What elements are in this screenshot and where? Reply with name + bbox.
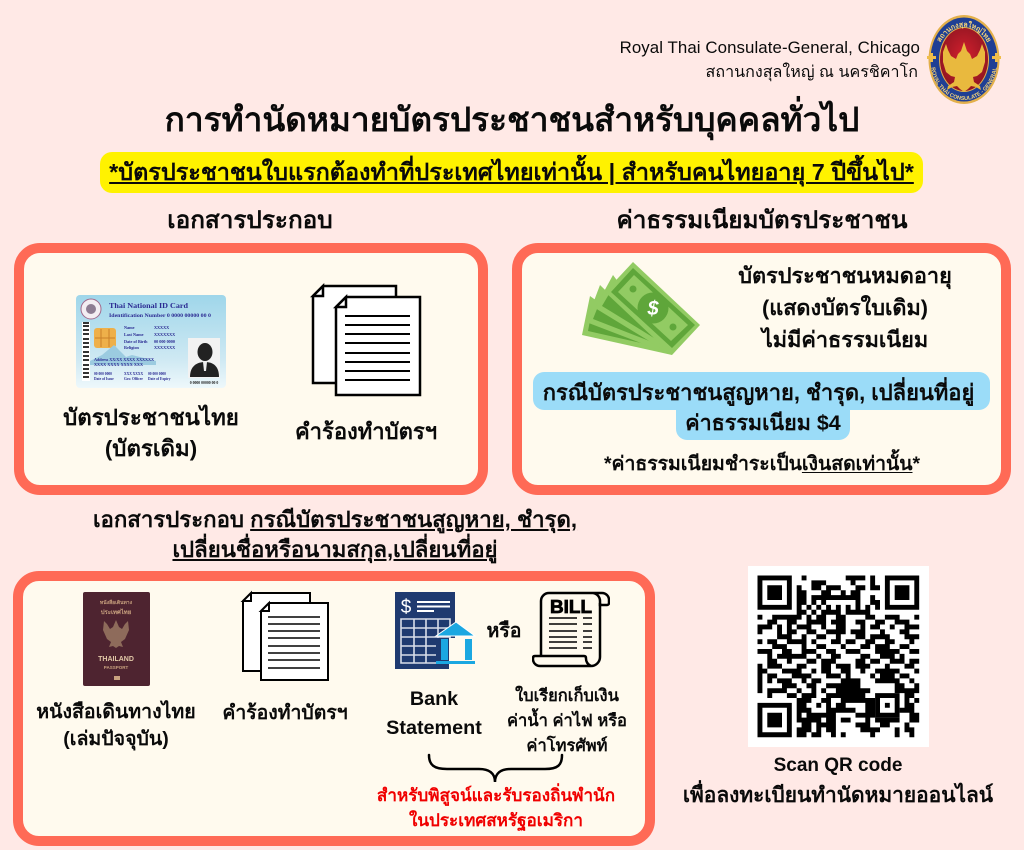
icon: Thai ID card: XXXXXXX xyxy=(154,332,175,337)
icon: application forms xyxy=(310,283,422,396)
icon: Thai ID card: Address XX/XX XXXX XXXXXX xyxy=(94,357,154,362)
note: proof of residence: ในประเทศสหรัฐอเมริกา xyxy=(409,811,583,830)
heading: documents for lost or changed cards: เอกสารประกอบ กรณีบัตรประชาชนสูญหาย, ชำรุด, xyxy=(93,507,577,532)
icon: consulate emblem xyxy=(927,15,1001,104)
text: expired card fee: บัตรประชาชนหมดอายุ xyxy=(738,263,952,288)
label: Thai ID card: (บัตรเดิม) xyxy=(105,436,197,461)
icon: bank statement xyxy=(395,592,476,669)
consulate name: Royal Thai Consulate-General, Chicago xyxy=(620,38,920,57)
callout: lost card fee: กรณีบัตรประชาชนสูญหาย, ชำรุด, เปลี่ยนที่อยู่ xyxy=(543,380,974,405)
icon: curly brace xyxy=(428,754,564,782)
icon: Thai ID card: Date of Expiry xyxy=(148,377,171,381)
icon: Thai ID card: Name xyxy=(124,325,135,330)
notice banner xyxy=(100,152,923,193)
icon: Thai ID card: XXXXXXX xyxy=(154,345,175,350)
label: application form: คำร้องทำบัตรฯ xyxy=(222,702,348,724)
icon: Thai ID card: 0 0000 00000 00 0 xyxy=(190,381,218,385)
heading: documents for lost or changed cards: เปลี่ยนชื่อหรือนามสกุล,เปลี่ยนที่อยู่ xyxy=(172,537,498,562)
label: Thai passport: (เล่มปัจจุบัน) xyxy=(63,728,169,750)
icon: Thai ID card: Date of Issue xyxy=(94,377,114,381)
icon: utility bill: BILL xyxy=(550,597,592,617)
label: bank statement: Statement xyxy=(386,717,482,739)
callout: lost card fee: ค่าธรรมเนียม $4 xyxy=(685,411,841,435)
label: Thai passport xyxy=(36,700,196,750)
QR code xyxy=(748,566,929,747)
icon: Thai ID card: Gov. Officer xyxy=(124,377,143,381)
icon: Thai passport: หนังสือเดินทาง xyxy=(100,599,133,606)
callout: lost card fee xyxy=(533,372,990,440)
label: bank statement xyxy=(386,688,482,739)
panel: fees xyxy=(512,243,1011,495)
consulate name: สถานกงสุลใหญ่ ณ นครชิคาโก xyxy=(706,63,918,81)
icon: money: $ xyxy=(646,298,659,320)
panel: documents xyxy=(14,243,488,495)
label: utility bills xyxy=(507,685,627,755)
note: proof of residence: สำหรับพิสูจน์และรับรองถิ่นพำนัก xyxy=(377,786,615,805)
icon: Thai ID card: Identification Number 0 0000 00000 00 0 xyxy=(109,314,212,319)
title: การทำนัดหมายบัตรประชาชนสำหรับบุคคลทั่วไป xyxy=(165,102,859,139)
icon: Thai ID card: 00 000 0000 xyxy=(148,372,166,376)
icon: Thai passport: PASSPORT xyxy=(104,665,128,670)
icon: consulate emblem: ROYAL THAI CONSULATE - GENERAL xyxy=(932,67,997,100)
text: or: หรือ xyxy=(486,620,522,642)
label: utility bills: ค่าน้ำ ค่าไฟ หรือ xyxy=(507,712,627,730)
label: Thai ID card xyxy=(63,404,239,461)
label: utility bills: ค่าโทรศัพท์ xyxy=(526,737,608,755)
icon: application forms xyxy=(240,590,329,681)
notice banner: *บัตรประชาชนใบแรกต้องทำที่ประเทศไทยเท่านั้น | สำหรับคนไทยอายุ 7 ปีขึ้นไป* xyxy=(109,159,914,185)
icon: Thai ID card: XXXX XXXX XXXX XXX xyxy=(94,362,143,367)
icon: utility bill xyxy=(532,592,610,668)
text: expired card fee xyxy=(738,263,952,352)
label: bank statement: Bank xyxy=(410,688,458,710)
label: Thai passport: หนังสือเดินทางไทย xyxy=(36,701,196,723)
note: cash only: *ค่าธรรมเนียมชำระเป็นเงินสดเท่านั้น* xyxy=(604,453,920,475)
icon: Thai ID card: 00 000 0000 xyxy=(94,372,112,376)
panel: documents for lost or changed cards xyxy=(13,571,655,846)
icon: Thai ID card: Date of Birth xyxy=(124,339,148,344)
heading: documents for lost or changed cards xyxy=(93,507,578,564)
heading: documents: เอกสารประกอบ xyxy=(167,207,333,234)
text: scan QR code: เพื่อลงทะเบียนทำนัดหมายออนไลน์ xyxy=(683,784,993,806)
icon: Thai ID card xyxy=(76,295,226,388)
label: utility bills: ใบเรียกเก็บเงิน xyxy=(515,687,619,705)
icon: Thai ID card: XXX XXXX xyxy=(124,372,143,376)
icon: Thai passport: ประเทศไทย xyxy=(101,608,132,616)
icon: bank statement: $ xyxy=(401,597,412,618)
text: expired card fee: ไม่มีค่าธรรมเนียม xyxy=(762,327,928,352)
icon: Thai ID card: Thai National ID Card xyxy=(109,301,189,310)
icon: money xyxy=(582,262,700,355)
icon: Thai ID card: Religion xyxy=(124,345,140,350)
icon: Thai ID card: 00 000 0000 xyxy=(154,339,175,344)
consulate name xyxy=(620,38,920,82)
text: scan QR code: Scan QR code xyxy=(774,755,902,776)
text: expired card fee: (แสดงบัตรใบเดิม) xyxy=(762,295,928,320)
icon: Thai ID card: XXXXX xyxy=(154,325,169,330)
icon: consulate emblem: สถานกงสุลใหญ่ไทย xyxy=(938,20,991,42)
note: proof of residence xyxy=(377,783,615,832)
icon: Thai passport xyxy=(83,592,150,686)
icon: Thai ID card: Last Name xyxy=(124,332,144,337)
text: scan QR code xyxy=(683,755,994,806)
label: application form: คำร้องทำบัตรฯ xyxy=(295,419,437,444)
icon: Thai passport: THAILAND xyxy=(98,656,134,663)
label: Thai ID card: บัตรประชาชนไทย xyxy=(63,405,239,430)
heading: fees: ค่าธรรมเนียมบัตรประชาชน xyxy=(616,207,908,234)
